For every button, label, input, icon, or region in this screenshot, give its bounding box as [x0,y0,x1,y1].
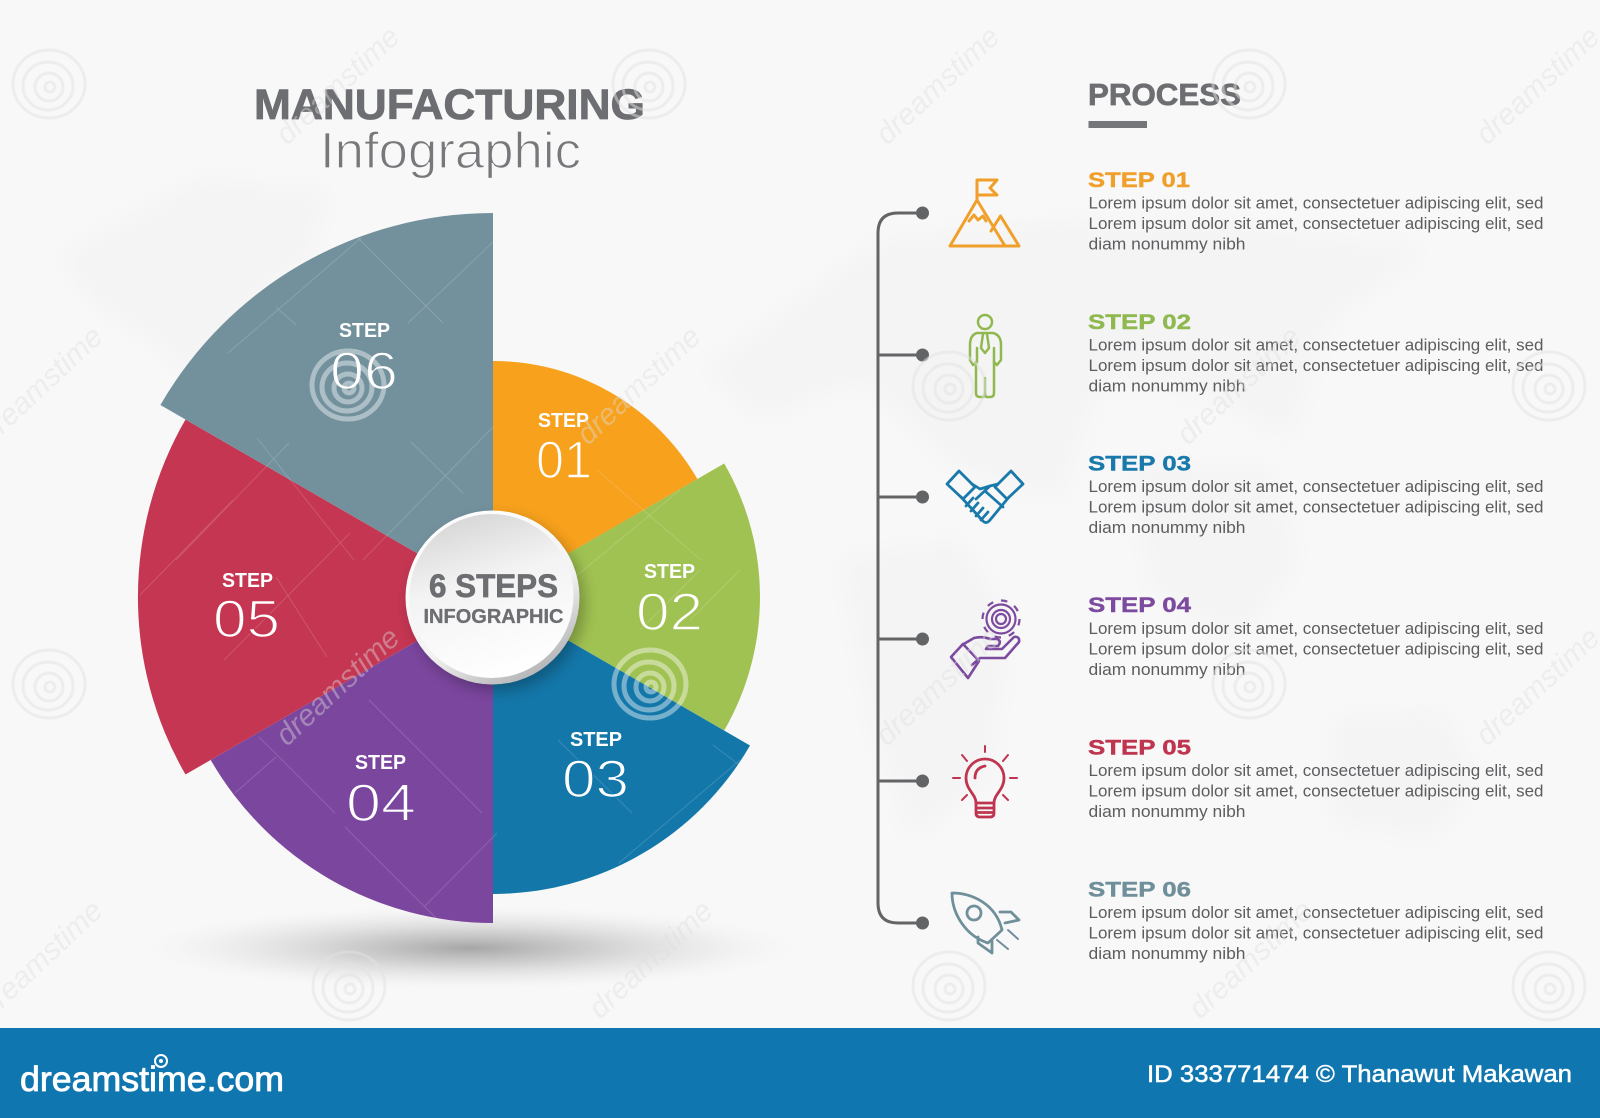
label: step 04: 04 [346,774,416,833]
label: step 05 [213,570,280,649]
label: step 02: STEP [644,561,695,583]
icon: light bulb [953,746,1017,817]
step 03 text [1088,452,1544,537]
step 03 text: Lorem ipsum dolor sit amet, consectetuer adipiscing elit, sed [1088,478,1544,496]
step 04 text: diam nonummy nibh [1088,661,1246,679]
watermark text: dreamstime [1182,894,1319,1025]
watermark text: dreamstime [269,20,406,151]
sector: step 01 [493,361,697,597]
label: step 03: 03 [562,750,629,809]
step 02 text: diam nonummy nibh [1088,378,1246,396]
process heading [1088,77,1241,128]
process heading: PROCESS [1088,77,1241,112]
label: step 01: 01 [536,431,592,490]
pie chart [138,213,760,923]
step 05 text: Lorem ipsum dolor sit amet, consectetuer adipiscing elit, sed [1088,762,1544,780]
step 03 text: diam nonummy nibh [1088,519,1246,537]
step 02 text: Lorem ipsum dolor sit amet, consectetuer adipiscing elit, sed [1088,357,1544,375]
sector: step 06 [160,213,493,597]
title: MANUFACTURING [254,81,645,129]
step 02 text: STEP 02 [1088,310,1191,334]
step 06 text: Lorem ipsum dolor sit amet, consectetuer adipiscing elit, sed [1088,924,1544,942]
icon: mountain with flag [950,180,1019,246]
center disc [406,510,585,691]
step 01 text: Lorem ipsum dolor sit amet, consectetuer adipiscing elit, sed [1088,194,1544,212]
step 06 text: Lorem ipsum dolor sit amet, consectetuer adipiscing elit, sed [1088,904,1544,922]
label: step 05: 05 [213,590,280,649]
title: Infographic [320,122,581,179]
footer logo: dreamstime.com [20,1060,284,1099]
step 04 text: Lorem ipsum dolor sit amet, consectetuer adipiscing elit, sed [1088,620,1544,638]
step 04 text [1088,593,1544,679]
step 02 text [1088,310,1544,396]
watermark text: dreamstime [1170,320,1307,451]
step 01 text: Lorem ipsum dolor sit amet, consectetuer adipiscing elit, sed [1088,215,1544,233]
label: step 02: 02 [636,583,703,642]
sector: step 02 [493,464,760,730]
label: step 02 [636,561,703,642]
icon: person [970,315,1001,397]
label: step 03 [562,729,629,809]
label: step 04 [346,752,416,833]
sector: step 04 [211,597,493,923]
title [254,81,645,179]
label: step 06 [330,320,398,401]
timeline connector [878,206,929,930]
label: step 03: STEP [570,729,622,751]
watermark text: dreamstime [582,894,719,1025]
step 05 text: STEP 05 [1088,736,1191,760]
footer bar [0,1028,1600,1118]
step 05 text: diam nonummy nibh [1088,803,1246,821]
label: step 04: STEP [355,752,406,774]
icon: handshake [947,471,1023,522]
watermark text: dreamstime [269,621,406,752]
step 01 text: STEP 01 [1088,168,1190,192]
center disc: 6 STEPS [429,568,558,604]
step 03 text: STEP 03 [1088,452,1191,476]
label: step 05: STEP [222,570,273,592]
label: step 01: STEP [538,410,589,432]
ground shadow [125,904,815,992]
step 01 text [1088,168,1544,254]
step 01 text: diam nonummy nibh [1088,236,1246,254]
step 05 text: Lorem ipsum dolor sit amet, consectetuer adipiscing elit, sed [1088,782,1544,800]
sector: step 03 [493,597,750,894]
icon: hand with gear [951,600,1020,678]
sector: step 05 [138,420,493,774]
icon: rocket [952,893,1019,953]
label: step 06: STEP [339,320,390,342]
faint world map [60,180,1480,840]
watermark text: dreamstime [570,320,707,451]
step 06 text: diam nonummy nibh [1088,945,1246,963]
step 04 text: STEP 04 [1088,593,1191,617]
step 06 text: STEP 06 [1088,878,1191,902]
footer credit: ID 333771474 © Thanawut Makawan [1147,1061,1572,1088]
step 02 text: Lorem ipsum dolor sit amet, consectetuer adipiscing elit, sed [1088,336,1544,354]
center disc: INFOGRAPHIC [424,606,564,628]
step 05 text [1088,736,1544,821]
watermark text: dreamstime [869,621,1006,752]
step 03 text: Lorem ipsum dolor sit amet, consectetuer adipiscing elit, sed [1088,498,1544,516]
step 06 text [1088,878,1544,963]
watermark text: dreamstime [869,20,1006,151]
step 04 text: Lorem ipsum dolor sit amet, consectetuer adipiscing elit, sed [1088,640,1544,658]
label: step 06: 06 [330,342,398,401]
